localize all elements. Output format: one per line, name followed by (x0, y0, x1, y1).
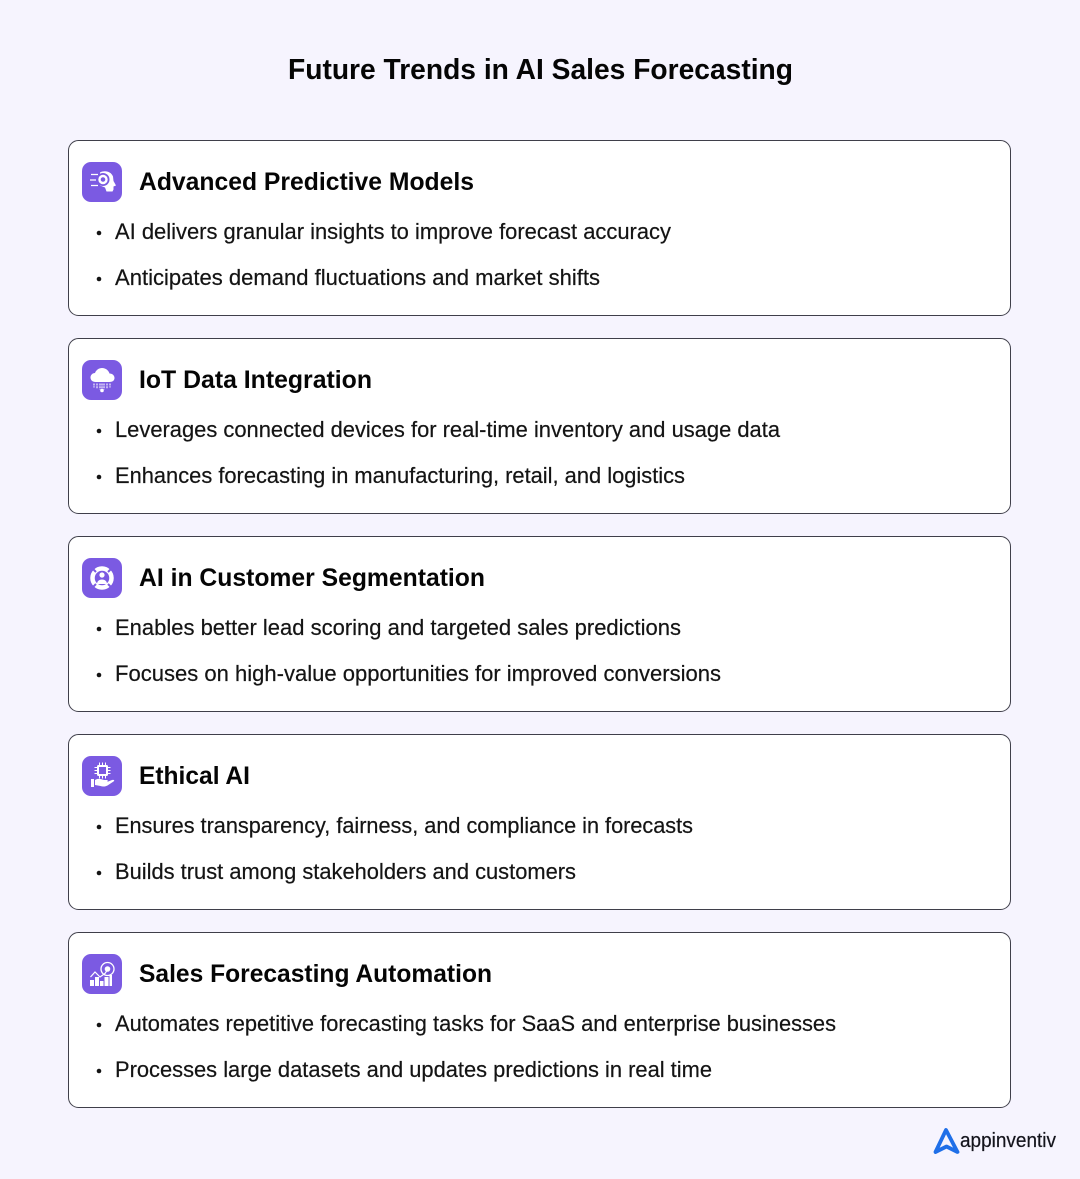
heading: Advanced Predictive Models (139, 168, 474, 196)
heading: Ethical AI (139, 762, 250, 790)
icon: logo triangle (936, 1130, 958, 1152)
heading: AI in Customer Segmentation (139, 564, 485, 592)
bullet list: Enhances forecasting in manufacturing, retail, and logistics (115, 463, 685, 488)
bullet list: Automates repetitive forecasting tasks for SaaS and enterprise businesses (115, 1011, 836, 1036)
title: Future Trends in AI Sales Forecasting (288, 54, 793, 86)
icon: hand holding AI chip (82, 756, 122, 796)
icon: AI head with gear (82, 162, 122, 202)
bullet list: Ensures transparency, fairness, and compliance in forecasts (115, 813, 693, 838)
icon: customer target (82, 558, 122, 598)
icon: IoT cloud (82, 360, 122, 400)
logo: appinventiv: appinventiv (960, 1130, 1056, 1152)
panel: AI in Customer Segmentation (68, 536, 1010, 712)
bullet list: Leverages connected devices for real-time inventory and usage data (115, 417, 781, 442)
bullet list (97, 615, 721, 686)
panel: Sales Forecasting Automation (68, 932, 1010, 1108)
bullet list (97, 813, 693, 884)
panel: IoT Data Integration (68, 338, 1010, 514)
bullet list: Enables better lead scoring and targeted sales predictions (115, 615, 681, 640)
bullet list: AI delivers granular insights to improve forecast accuracy (115, 219, 671, 244)
icon: growth chart with target (82, 954, 122, 994)
bullet list (97, 1011, 836, 1082)
bullet list: Processes large datasets and updates predictions in real time (115, 1057, 712, 1082)
bullet list: Focuses on high-value opportunities for improved conversions (115, 661, 721, 686)
bullet list: Builds trust among stakeholders and customers (115, 859, 576, 884)
panel: Advanced Predictive Models (68, 140, 1010, 316)
heading: Sales Forecasting Automation (139, 960, 492, 988)
bullet list: Anticipates demand fluctuations and market shifts (115, 265, 600, 290)
bullet list (97, 219, 671, 290)
heading: IoT Data Integration (139, 366, 372, 394)
panel: Ethical AI (68, 734, 1010, 910)
bullet list (97, 417, 781, 488)
